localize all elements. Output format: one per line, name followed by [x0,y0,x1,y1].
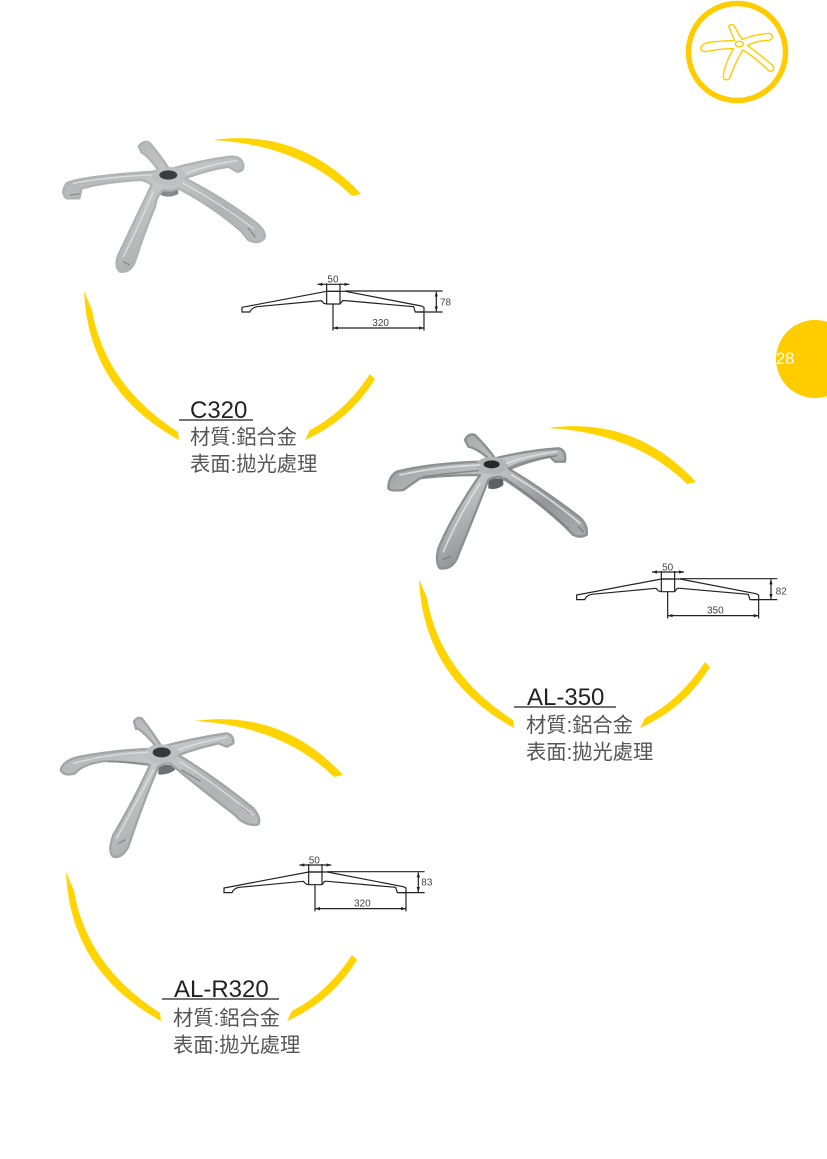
model label: 材質:鋁合金 [190,426,297,449]
diagram: AL-350 dimensions: 82 [776,586,787,597]
icon: chair base logo [688,4,786,100]
diagram: AL-350 dimensions: 50 [662,562,674,573]
model label: C320 [190,397,247,424]
yellow arcs [84,138,375,440]
model label [514,684,653,764]
model label [162,976,300,1057]
diagram: C320 dimensions: 50 [327,275,339,286]
yellow arcs [66,719,357,1021]
product: AL-R320 [61,718,433,1057]
diagram: C320 dimensions [242,275,452,331]
model label: 表面:拋光處理 [526,741,653,764]
page tab with page number [776,320,827,398]
photo: C320 star base [63,142,265,272]
model label: 材質:鋁合金 [173,1007,280,1030]
model label: AL-R320 [174,976,269,1003]
model label [179,397,317,476]
diagram: C320 dimensions: 78 [440,297,452,308]
model label: 表面:拋光處理 [190,453,317,476]
model label: AL-350 [527,684,604,711]
photo: AL-350 star base [388,434,587,568]
diagram: AL-R320 dimensions [224,855,433,911]
diagram: AL-350 dimensions: 350 [707,606,724,617]
photo: AL-R320 star base [61,718,259,857]
diagram: AL-R320 dimensions: 83 [421,878,433,889]
model label: 材質:鋁合金 [526,714,633,737]
yellow arcs [419,426,710,728]
product: AL-350 [388,426,787,764]
diagram: AL-350 dimensions [577,562,787,618]
diagram: AL-R320 dimensions: 320 [354,899,371,910]
diagram: C320 dimensions: 320 [372,318,389,329]
diagram: AL-R320 dimensions: 50 [309,855,320,866]
product: C320 [63,138,452,476]
page tab with page number: 28 [776,350,794,368]
model label: 表面:拋光處理 [173,1034,300,1057]
